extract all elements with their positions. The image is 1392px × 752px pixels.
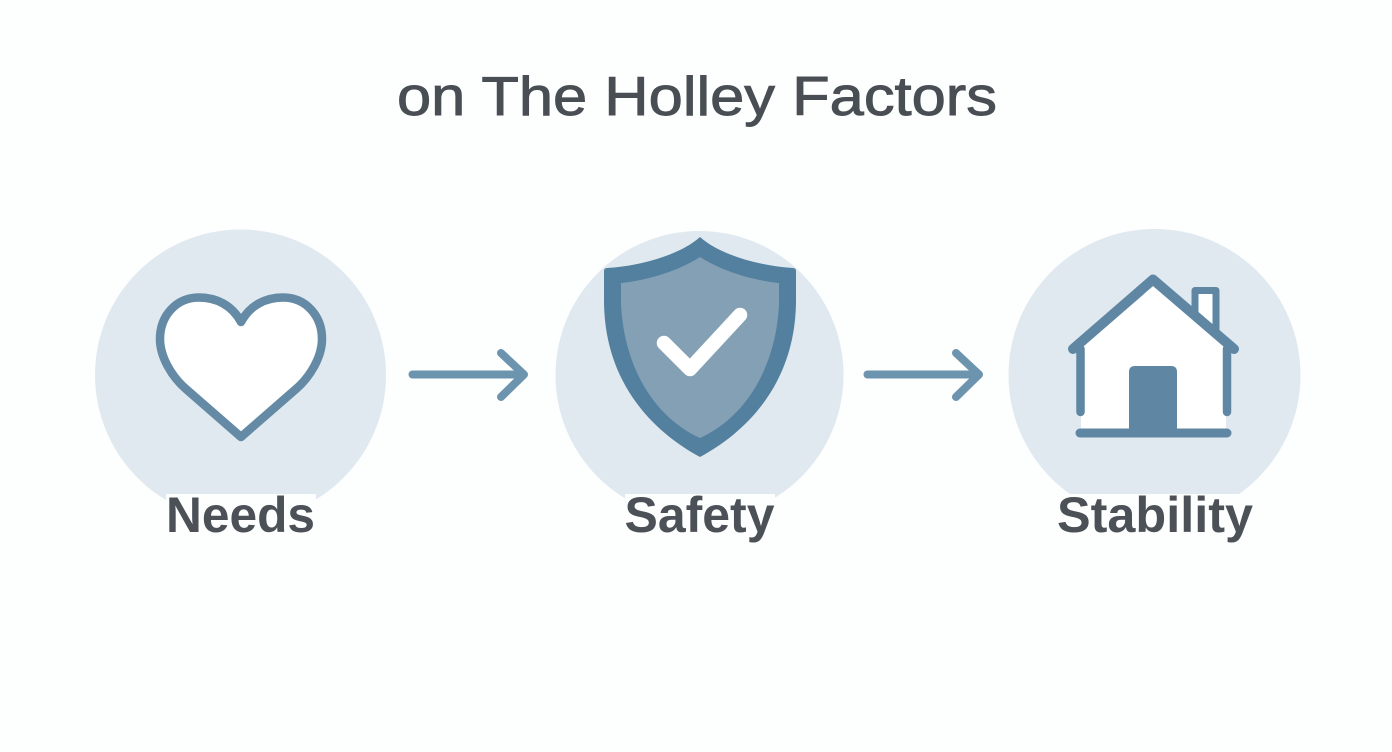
- needs background circle: [95, 230, 386, 520]
- needs label backing: [166, 494, 316, 524]
- roof: [1073, 280, 1234, 349]
- panel: safety: [556, 231, 844, 543]
- stability label backing: [1057, 494, 1254, 524]
- walls: [1080, 349, 1227, 412]
- stability background circle: [1008, 229, 1300, 521]
- safety label: Safety: [624, 487, 775, 543]
- title: on The Holley Factors: [397, 65, 997, 127]
- safety label backing: [625, 494, 775, 524]
- arrow: needs to safety: [412, 353, 524, 397]
- icon: house: [1073, 280, 1234, 433]
- icon: shield: [604, 237, 796, 457]
- safety background circle: [556, 231, 844, 519]
- door: [1129, 366, 1177, 433]
- chimney: [1195, 290, 1216, 333]
- shield inner: [621, 257, 779, 438]
- arrow: safety to stability: [868, 353, 979, 397]
- stability label: Stability: [1057, 487, 1253, 543]
- panel: stability: [1008, 229, 1300, 543]
- panel: needs: [95, 230, 386, 543]
- check mark: [664, 315, 740, 369]
- icon: heart: [160, 298, 322, 437]
- house body: [1081, 281, 1226, 429]
- ground line: [1080, 428, 1227, 438]
- needs label: Needs: [166, 487, 315, 543]
- shield outer: [604, 237, 796, 457]
